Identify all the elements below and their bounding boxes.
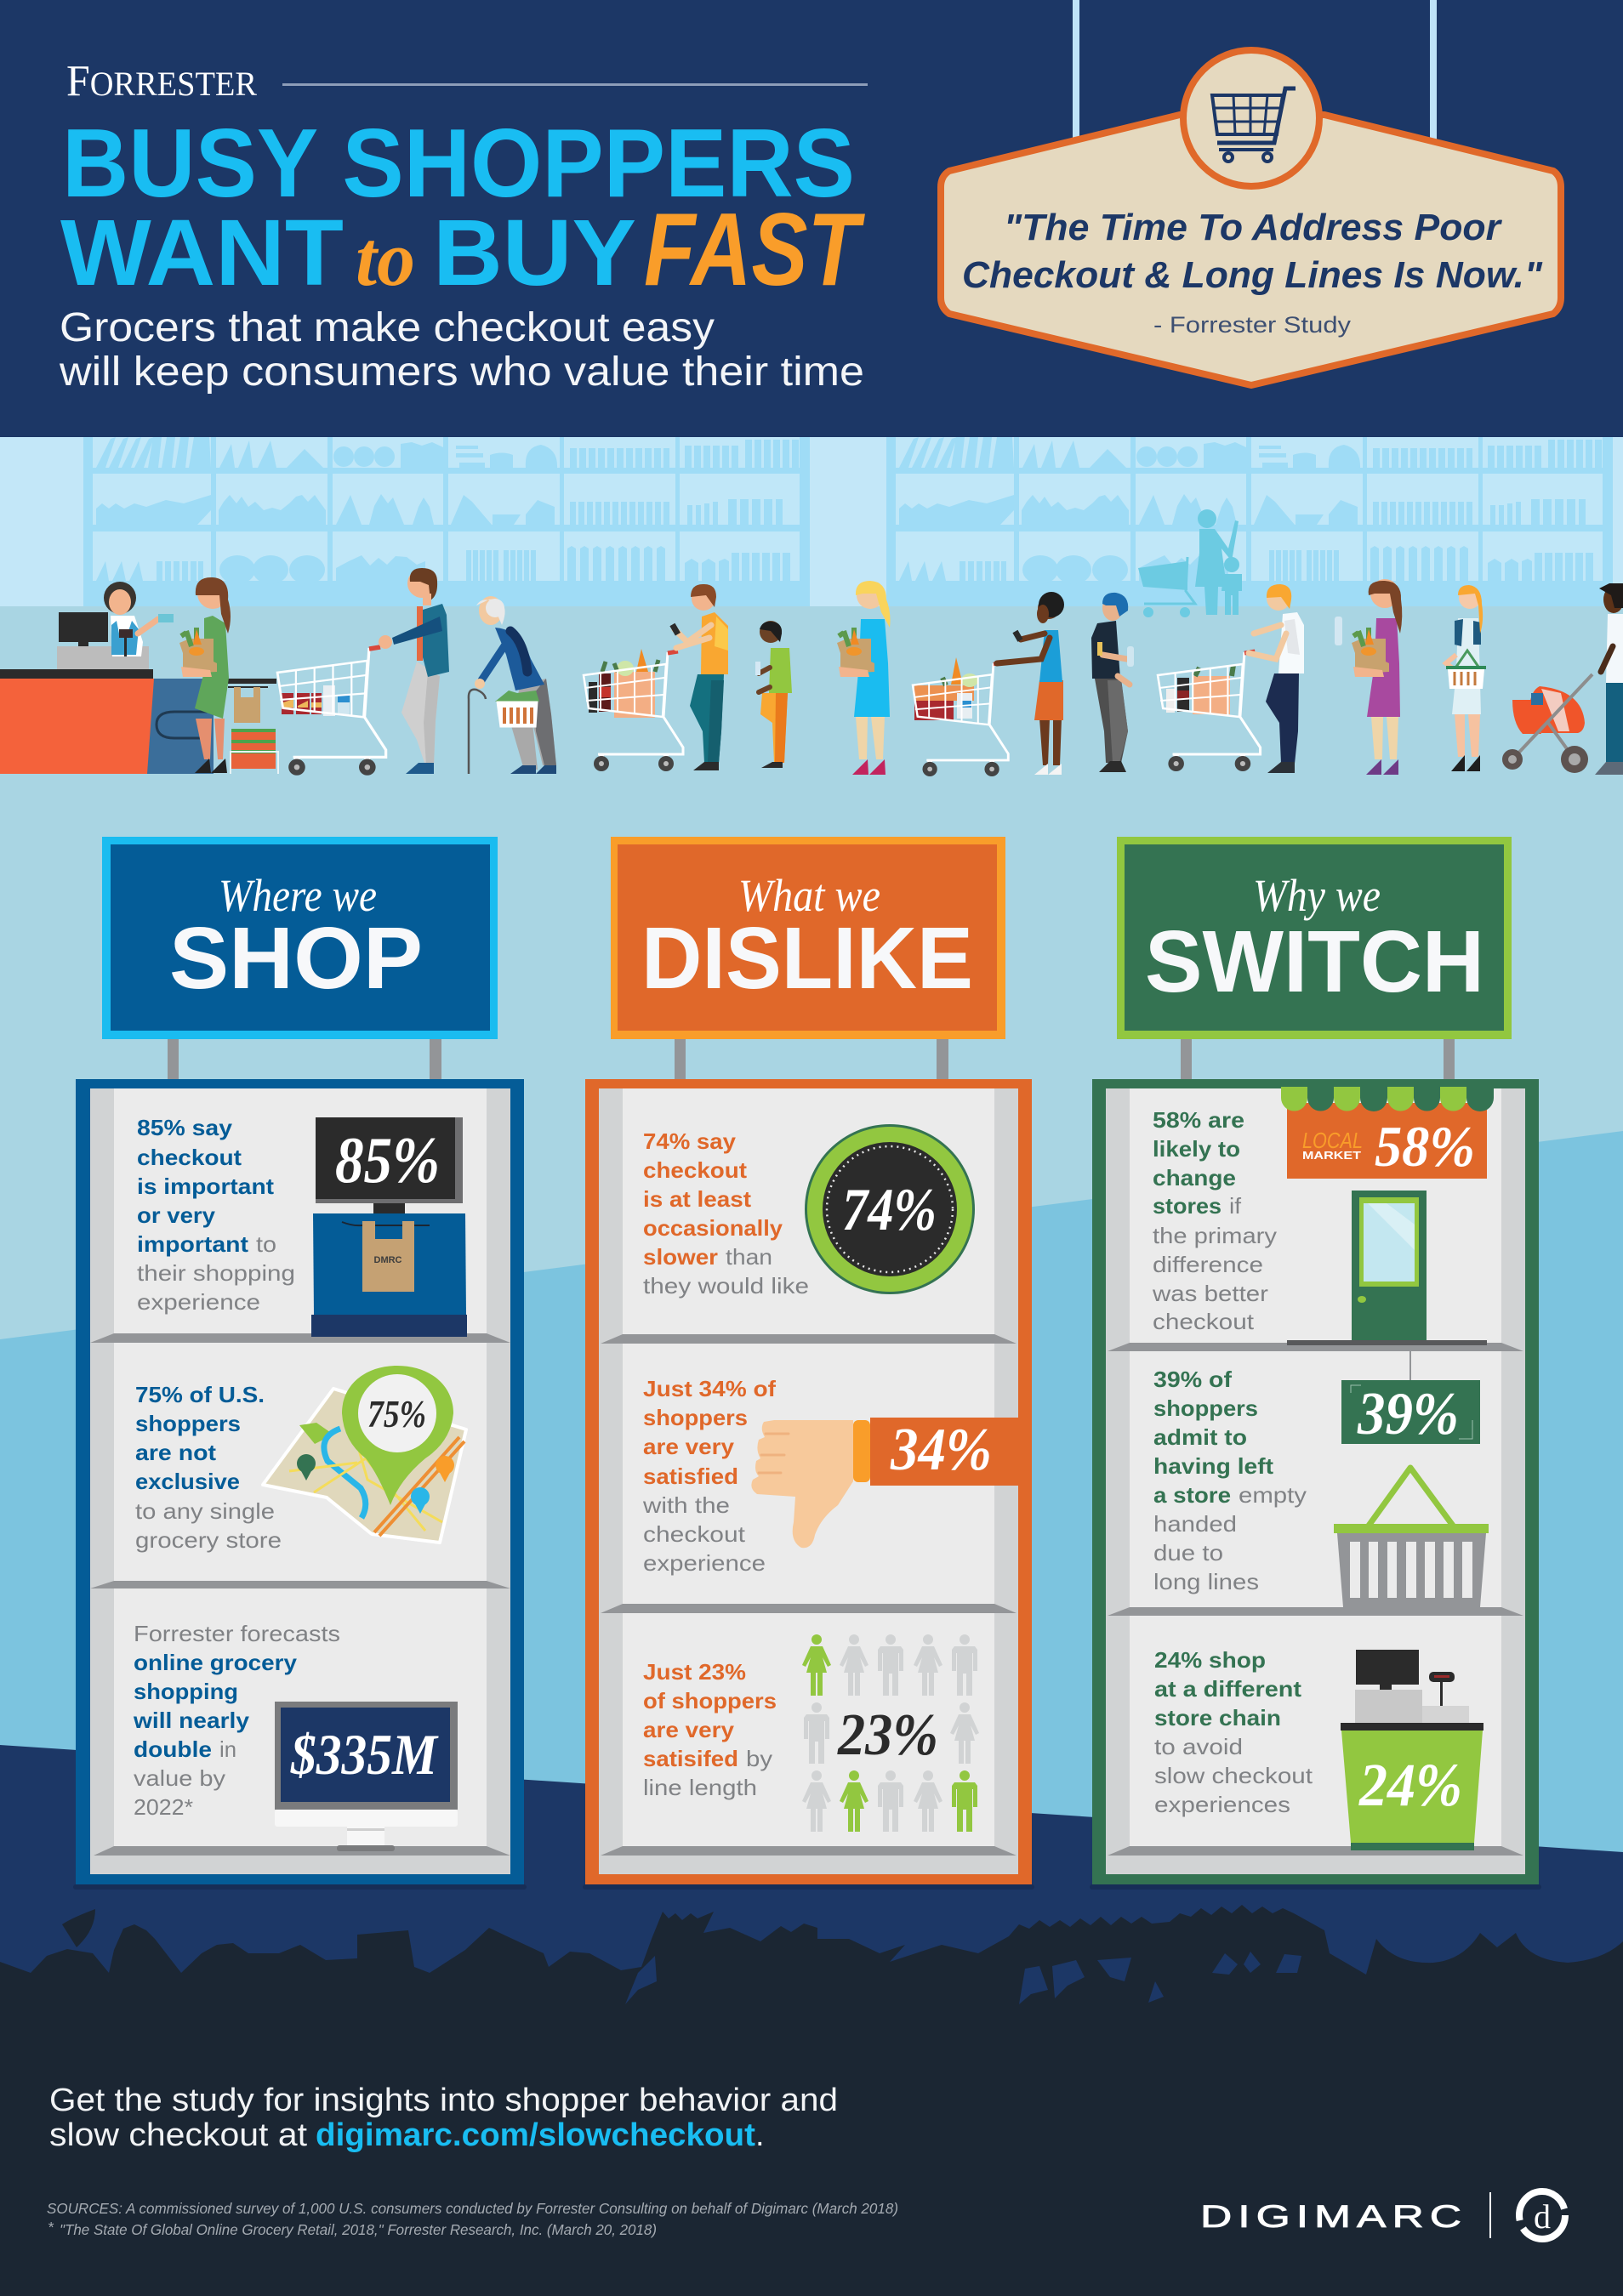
text: 34%: checkout [643,1521,746,1547]
person: woman with basket in white dress [1446,585,1486,771]
logo: Digimarc: DIGIMARC [1200,2199,1467,2234]
icon: checkout register 24% [1341,1650,1483,1850]
subtitle: will keep consumers who value their time [59,350,864,395]
text: 24%: at a different [1154,1676,1301,1702]
title: BUY [433,201,636,305]
person: woman with phone and orange skirt [997,592,1064,775]
hanging quote sign [941,0,1561,385]
text: 85%: checkout [137,1145,242,1170]
text: 58%: the primary [1153,1223,1277,1248]
icon: hanging 39% sign and basket [1334,1350,1489,1607]
text: 58%: if [1229,1193,1242,1219]
icon: people grid 23% [802,1634,979,1832]
quote text: Checkout & Long Lines Is Now." [962,254,1543,296]
icon: map with location pins: 75% [367,1392,426,1435]
title [60,110,866,307]
call to action [49,2083,838,2153]
person: elderly man with cane and basket [469,596,556,774]
cart 3 [913,657,1008,776]
signboard: why we switch [1117,837,1512,1082]
logo: Digimarc [1200,2191,1565,2239]
logo: Forrester: FORRESTER [66,57,257,105]
text: 39%: admit to [1153,1424,1247,1450]
cart 2 [584,649,683,771]
text: 74%: is at least [643,1186,751,1212]
panel: shop shelves [73,1079,527,1890]
text: 74%: slower [643,1244,718,1270]
text: 39%: a store [1153,1482,1231,1508]
text: 39%: empty [1239,1482,1307,1508]
stroller [1502,674,1592,773]
text: 34%: are very [643,1434,735,1459]
text: 85% [137,1115,295,1315]
silhouette: background shopper with child and cart [1138,509,1242,617]
text: 75%: grocery store [135,1527,282,1553]
call to action: . [755,2117,765,2153]
text: 75%: are not [135,1440,216,1465]
cart 1 [277,647,386,776]
text: forecast: shopping [134,1679,238,1704]
quote attribution: - Forrester Study [1153,312,1352,338]
icon: scanner with 85% screen and bag: 85% [335,1123,440,1196]
text: 74%: they would like [643,1273,809,1299]
signboard: why we switch: Why we [1253,870,1381,921]
text: forecast: value by [134,1765,225,1791]
panel: switch shelves [1090,1079,1541,1890]
text: 58%: 58% are [1153,1107,1244,1133]
background shelves: left [83,437,810,606]
text: 74% [643,1128,809,1299]
person: man pushing stroller [1595,583,1623,775]
text: 58%: difference [1153,1252,1263,1277]
call to action: Get the study for insights into shopper behavior and [49,2083,838,2118]
text: 39%: due to [1153,1540,1223,1566]
text: 24%: 24% shop [1154,1647,1266,1673]
text: 24%: experiences [1154,1792,1290,1817]
text: 58%: likely to [1153,1136,1240,1162]
text: 85%: their shopping [137,1260,295,1286]
icon: checkout register 24%: 24% [1358,1751,1462,1819]
person: man in teal jacket [379,568,449,774]
icon: shopping cart [1212,88,1296,162]
icon: storefront 58% [1281,1087,1494,1345]
subtitle: Grocers that make checkout easy [60,305,715,350]
text: 23%: line length [643,1775,757,1800]
text: 85%: 85% say [137,1115,233,1140]
icon: clock 74% [805,1124,975,1294]
background shelves: right [886,437,1613,606]
icon: storefront 58%: LOCAL [1302,1128,1363,1153]
icon: hanging 39% sign and basket: 39% [1357,1381,1459,1447]
text: 34% [642,1376,776,1576]
icon: computer monitor $335M [275,1702,458,1851]
person: woman in purple dress [1335,579,1402,775]
text: 23%: satisifed [643,1746,738,1771]
signboard: where we shop [102,837,498,1082]
person: blonde woman in blue dress [837,581,890,775]
title: BUSY SHOPPERS [62,110,855,218]
header band [0,0,1623,437]
text: 34%: Just 34% of [643,1376,776,1401]
logo mark: d in ring [1519,2191,1565,2239]
text: 34%: with the [642,1492,730,1518]
icon: map with location pins [263,1366,466,1543]
call to action: slow checkout at [49,2117,307,2153]
quote text [962,207,1543,296]
text: 34%: experience [643,1550,766,1576]
icon: scanner with 85% screen and bag [311,1117,467,1337]
title: FAST [644,191,866,307]
text: 75%: 75% of U.S. [135,1382,265,1407]
text: forecast [133,1621,340,1820]
text: 39%: 39% of [1153,1367,1232,1392]
text: 24%: to avoid [1154,1734,1243,1759]
text: 85%: or very [137,1202,216,1228]
text: forecast: 2022* [134,1794,193,1820]
logo mark: d in ring: d [1534,2197,1551,2236]
cart 4 [1158,651,1261,771]
text: 74%: occasionally [643,1215,783,1241]
sources [47,2200,898,2238]
text: 24%: slow checkout [1154,1763,1313,1788]
person: security guard [1091,593,1134,772]
sources: "The State Of Global Online Grocery Retail, 2018," Forrester Research, Inc. (March 20, 2018) [60,2221,657,2238]
text: 58%: was better [1152,1281,1268,1306]
text: 75%: to any single [135,1498,275,1524]
text: 58% [1152,1107,1277,1334]
signboard: what we dislike [611,837,1005,1082]
sources: SOURCES: A commissioned survey of 1,000 U.S. consumers conducted by Forrester Consulting on behalf of Digimarc (March 2018) [47,2200,898,2217]
icon: thumbs-down hand 34%: 34% [890,1417,992,1483]
person: man in yellow vest with phone [669,584,728,770]
signboard: where we shop: Where we [219,870,377,921]
text: 39%: having left [1153,1453,1273,1479]
icon: scanner with 85% screen and bag: DMRC [374,1255,402,1265]
text: 75%: shoppers [135,1411,241,1436]
scene: checkout counter and cashier [0,582,278,774]
text: 58%: change [1153,1165,1236,1191]
sign badge circle [1183,50,1319,186]
quote text: "The Time To Address Poor [1004,207,1503,248]
text: 23% [643,1659,777,1800]
text: 23%: are very [643,1717,735,1742]
text: 58%: checkout [1153,1309,1255,1334]
text: forecast: in [219,1736,236,1762]
text: forecast: will nearly [133,1708,250,1733]
signboard: what we dislike: DISLIKE [641,909,973,1007]
text: 85%: is important [137,1174,274,1199]
text: 85%: to [256,1231,276,1257]
text: forecast: double [134,1736,212,1762]
title: to [356,215,415,302]
text: 39% [1153,1367,1307,1594]
call to action: digimarc.com/slowcheckout [316,2117,755,2153]
title: WANT [60,201,344,305]
text: forecast: Forrester forecasts [134,1621,340,1646]
text: 24%: store chain [1154,1705,1281,1731]
text: 74%: 74% say [643,1128,737,1154]
text: forecast: online grocery [134,1650,298,1675]
text: 85%: important [137,1231,248,1257]
sources: * [48,2219,54,2236]
text: 23%: of shoppers [643,1688,777,1713]
text: 39%: shoppers [1153,1395,1258,1421]
signboard: why we switch: SWITCH [1145,912,1484,1010]
panel: dislike shelves [583,1079,1034,1890]
icon: storefront 58%: MARKET [1302,1149,1361,1162]
background: blue floor band [0,1131,1623,1871]
text: 39%: long lines [1153,1569,1259,1594]
text: 23%: by [746,1746,772,1771]
person: boy in green vest [755,621,792,768]
text: 23%: Just 23% [643,1659,746,1685]
text: 75% [135,1382,282,1553]
text: 34%: satisfied [643,1463,738,1489]
person: man in white shirt [1249,584,1304,773]
icon: people grid 23%: 23% [837,1702,938,1768]
subtitle [59,305,864,395]
text: 24% [1154,1647,1313,1817]
icon: computer monitor $335M: $335M [290,1722,439,1787]
icon: clock 74%: 74% [842,1177,937,1243]
signboard: what we dislike: What we [738,870,880,921]
divider rule [282,83,868,86]
background: navy band [0,1745,1623,2296]
person: woman in green dress [179,577,231,773]
text: 74%: checkout [643,1157,747,1183]
signboard: where we shop: SHOP [169,909,423,1007]
text: 58%: stores [1153,1193,1222,1219]
text: 39%: handed [1153,1511,1237,1537]
icon: thumbs-down hand 34% [751,1417,1018,1548]
text: 75%: exclusive [135,1469,240,1494]
icon: storefront 58%: 58% [1375,1114,1475,1179]
skyline of groceries [0,1905,1623,2296]
cashier [104,582,174,656]
text: 85%: experience [137,1289,260,1315]
text: 34%: shoppers [643,1405,748,1430]
text: 74%: than [726,1244,772,1270]
